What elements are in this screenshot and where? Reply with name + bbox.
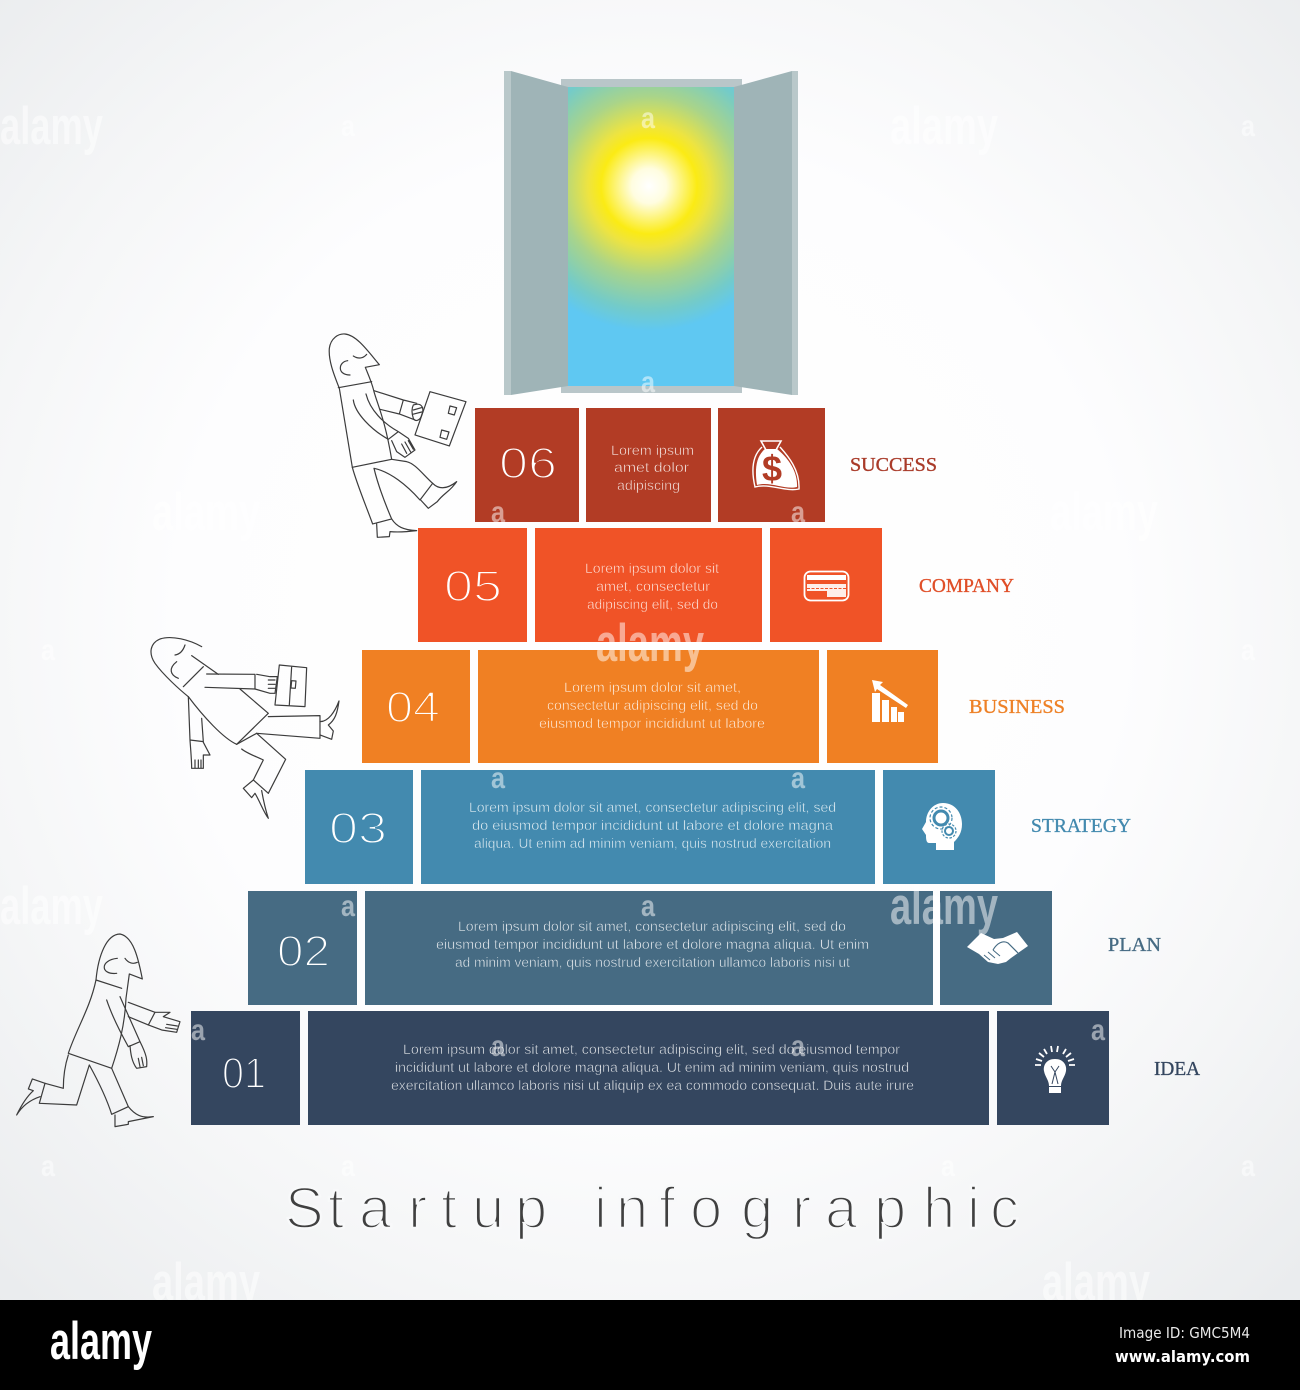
icon: credit card <box>804 572 848 600</box>
watermarks: alamy <box>0 97 103 156</box>
step 05: company: Lorem ipsum dolor sit <box>585 560 719 576</box>
watermarks: alamy <box>890 877 998 936</box>
step 01: idea: 01 <box>222 1049 266 1098</box>
step 03: strategy: STRATEGY <box>1031 815 1131 837</box>
step 06: success <box>475 408 937 522</box>
step 02: plan: PLAN <box>1108 934 1161 956</box>
step 05: company: COMPANY <box>919 575 1014 597</box>
image id: Image ID: GMC5M4 <box>1119 1324 1250 1342</box>
watermarks: a <box>341 110 355 143</box>
title: infographic <box>594 1176 1019 1241</box>
watermarks: a <box>41 634 55 667</box>
step 01: idea: Lorem ipsum dolor sit amet, consectetur adipiscing elit, sed do eiusmod tempor <box>403 1041 900 1057</box>
watermarks: a <box>641 890 655 923</box>
step 04: business: eiusmod tempor incididunt ut labore <box>539 715 765 731</box>
figure: man stepping onto step 06 <box>329 334 466 537</box>
step 03: strategy <box>305 770 1131 884</box>
step 02: plan: ad minim veniam, quis nostrud exercitation ullamco laboris nisi ut <box>455 954 850 970</box>
step 04: business: BUSINESS <box>969 696 1065 718</box>
icon: head with gears <box>922 803 962 850</box>
step 02: plan: eiusmod tempor incididunt ut labore et dolore magna aliqua. Ut enim <box>436 936 869 952</box>
watermarks: alamy <box>152 1253 260 1312</box>
step 04: business: consectetur adipiscing elit, sed do <box>547 697 758 713</box>
watermarks: a <box>491 496 505 529</box>
watermarks: a <box>191 1014 205 1047</box>
title: Startup <box>285 1176 547 1241</box>
step 03: strategy: do eiusmod tempor incididunt ut labore et dolore magna <box>472 817 833 833</box>
step 01: idea <box>191 1011 1201 1125</box>
right door leaf <box>734 71 798 395</box>
watermarks: a <box>641 366 655 399</box>
step 02: plan <box>248 891 1161 1005</box>
step 02: plan: 02 <box>277 927 330 976</box>
watermarks: a <box>41 1150 55 1183</box>
step 04: business <box>362 650 1065 763</box>
watermarks: alamy <box>152 483 260 542</box>
watermarks: alamy <box>890 97 998 156</box>
icon: falling bar chart <box>872 680 908 722</box>
open door with sun <box>504 71 798 395</box>
icon: light bulb <box>1035 1046 1075 1093</box>
watermarks: a <box>1241 634 1255 667</box>
watermarks: a <box>791 762 805 795</box>
watermarks: alamy <box>0 877 103 936</box>
step 01: idea: incididunt ut labore et dolore magna aliqua. Ut enim ad minim veniam, quis nostrud <box>395 1059 909 1075</box>
step 06: success: SUCCESS <box>850 454 937 476</box>
watermarks: a <box>341 890 355 923</box>
figure: man climbing at step 04 <box>151 638 339 818</box>
step 06: success: Lorem ipsum <box>611 442 694 458</box>
step 03: strategy: aliqua. Ut enim ad minim veniam, quis nostrud exercitation <box>474 835 831 851</box>
watermarks: a <box>491 762 505 795</box>
watermarks: a <box>641 102 655 135</box>
step 01: idea: exercitation ullamco laboris nisi ut aliquip ex ea commodo consequat. Duis aute irure <box>391 1077 914 1093</box>
step 01: idea: IDEA <box>1154 1058 1201 1080</box>
step 03: strategy: 03 <box>329 804 387 853</box>
watermarks: a <box>1241 1150 1255 1183</box>
footer logo: alamy <box>50 1312 152 1371</box>
icon: money bag: $ <box>762 448 782 489</box>
website: www.alamy.com <box>1115 1347 1250 1366</box>
step 05: company: 05 <box>444 562 502 611</box>
watermarks: a <box>791 1030 805 1063</box>
sky with sun <box>568 87 734 386</box>
footer bar <box>0 1300 1300 1390</box>
step 05: company: adipiscing elit, sed do <box>587 596 718 612</box>
watermarks: a <box>341 1150 355 1183</box>
title <box>285 1176 1019 1241</box>
watermarks: a <box>491 1030 505 1063</box>
step 04: business: Lorem ipsum dolor sit amet, <box>564 679 741 695</box>
watermarks: a <box>941 1150 955 1183</box>
step 06: success: adipiscing <box>617 477 680 493</box>
icon: money bag <box>753 441 799 490</box>
step 06: success: 06 <box>499 439 557 488</box>
watermarks: a <box>791 496 805 529</box>
door frame <box>561 79 742 393</box>
step 02: plan: Lorem ipsum dolor sit amet, consectetur adipiscing elit, sed do <box>458 918 846 934</box>
left door leaf <box>504 71 568 395</box>
figure: man running at step 01 <box>17 934 180 1127</box>
step 06: success: amet dolor <box>614 459 689 475</box>
step 03: strategy: Lorem ipsum dolor sit amet, consectetur adipiscing elit, sed <box>469 799 836 815</box>
icon: handshake <box>967 932 1028 964</box>
watermarks: a <box>1091 1014 1105 1047</box>
step 05: company: amet, consectetur <box>596 578 710 594</box>
watermarks: alamy <box>1050 483 1158 542</box>
step 05: company <box>418 528 1014 642</box>
watermarks: alamy <box>596 614 704 673</box>
watermarks: alamy <box>1042 1253 1150 1312</box>
step 04: business: 04 <box>386 683 440 732</box>
watermarks: a <box>1241 110 1255 143</box>
